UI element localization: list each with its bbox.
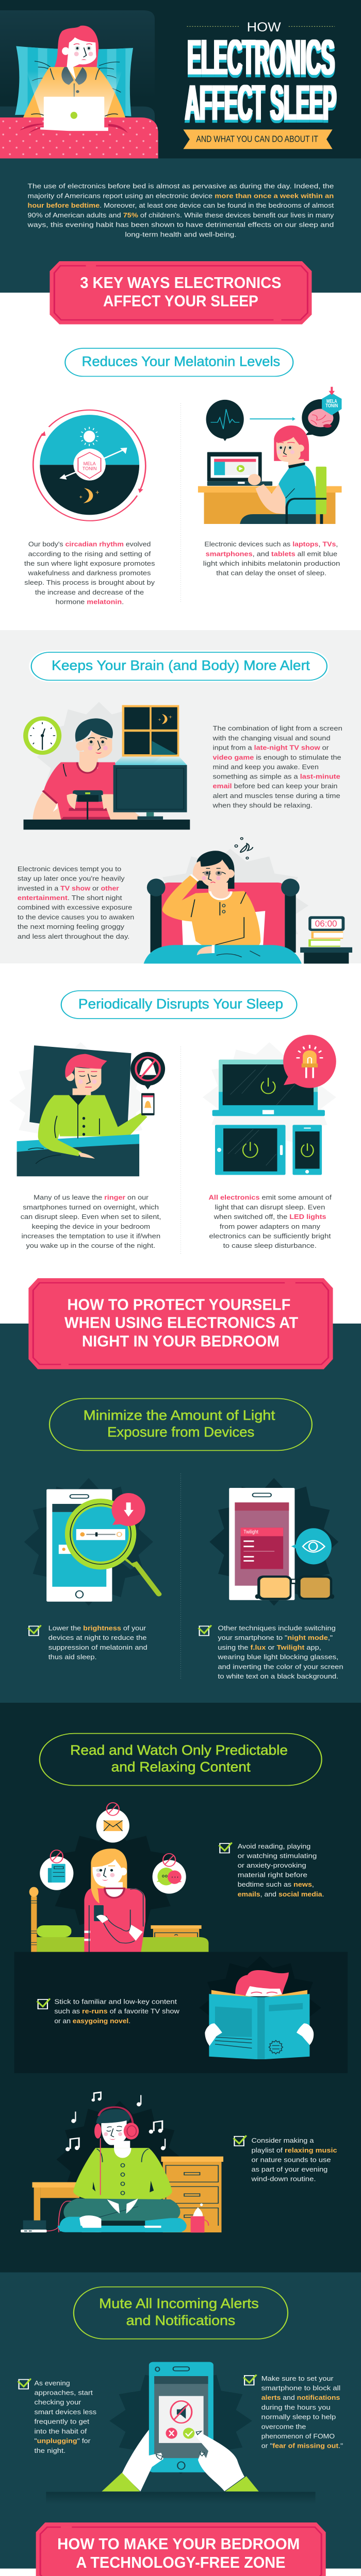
pill heading: Reduces Your Melatonin Levels bbox=[81, 353, 280, 369]
section heading: technology-free zone: A TECHNOLOGY-FREE ZONE bbox=[76, 2553, 286, 2571]
checklist: avoid stimulating material: emails, and social media. bbox=[238, 1891, 324, 1898]
illustration: woman at laptop with melatonin thought: TONIN bbox=[325, 403, 338, 409]
pill heading bbox=[74, 2287, 288, 2339]
title block bbox=[183, 20, 336, 149]
checklist: block notifications: smartphone to block all bbox=[261, 2384, 340, 2392]
intro paragraph: The use of electronics before bed is almost as pervasive as during the day. Indeed, the bbox=[28, 183, 334, 190]
text: combination of light: video game is enough to stimulate the bbox=[213, 754, 341, 761]
text: all electronics emit light: from power adapters on many bbox=[220, 1223, 320, 1230]
text: circadian rhythm bbox=[24, 540, 155, 606]
intro paragraph: majority of Americans report using an electronic device more than once a week within an bbox=[28, 192, 334, 200]
pill heading: Read and Watch Only Predictable bbox=[70, 1742, 288, 1758]
text: tempt you to stay up bbox=[18, 866, 134, 940]
text: all electronics emit light: All electronics emit some amount of bbox=[208, 1194, 332, 1201]
title: how: HOW bbox=[247, 20, 281, 35]
text: ringer: you wake up in the course of the night. bbox=[26, 1242, 155, 1250]
checklist: other techniques: your smartphone to "night mode," bbox=[218, 1634, 333, 1642]
text: blue light: light which inhibits melatonin production bbox=[203, 560, 340, 567]
checklist: unplugging: the night. bbox=[35, 2447, 65, 2454]
checklist: relaxing music: Consider making a bbox=[252, 2137, 314, 2144]
pill heading: Minimize the Amount of Light bbox=[84, 1408, 275, 1423]
checklist: block notifications: during the hours you bbox=[261, 2404, 331, 2412]
pill heading bbox=[40, 1734, 322, 1786]
text: circadian rhythm: hormone melatonin. bbox=[56, 598, 124, 606]
intro paragraph: ways, this evening habit has been shown to have detrimental effects on our sleep and bbox=[27, 221, 334, 229]
illustration: person listening to music bbox=[32, 2092, 223, 2232]
subtitle ribbon bbox=[183, 129, 333, 149]
panel: disrupts sleep bbox=[9, 991, 336, 1255]
intro paragraph: 90% of American adults and 75% of children's. While these devices benefit our lives in many bbox=[28, 212, 334, 219]
text: ringer: smartphones turned on overnight, which bbox=[23, 1204, 159, 1211]
checklist: avoid stimulating material bbox=[219, 1842, 324, 1898]
section heading: how to protect yourself: NIGHT IN YOUR BEDROOM bbox=[82, 1332, 280, 1350]
text: circadian rhythm: the increase and decrease of the bbox=[35, 589, 144, 597]
checklist: familiar content: such as re-runs of a favorite TV show bbox=[54, 2008, 179, 2015]
section heading: how to protect yourself bbox=[28, 1278, 333, 1369]
diagram: circadian melatonin cycle: MELA bbox=[84, 461, 96, 467]
checklist: lower brightness: thus aid sleep. bbox=[48, 1653, 97, 1661]
checklist: lower brightness: Lower the brightness of your bbox=[48, 1624, 146, 1632]
text: ringer: keeping the device in your bedroom bbox=[32, 1223, 150, 1230]
intro paragraph: long-term health and well-being. bbox=[125, 231, 236, 239]
text: all electronics emit light bbox=[208, 1194, 332, 1250]
checklist: unplugging: approaches, start bbox=[35, 2389, 93, 2397]
text: tempt you to stay up: entertainment. The short night bbox=[18, 894, 122, 902]
text: combination of light: something as simple as a last-minute bbox=[213, 773, 340, 781]
text: combination of light: The combination of light from a screen bbox=[213, 725, 342, 733]
text: combination of light: mind and keep you awake. Even bbox=[213, 764, 319, 771]
text: combination of light: when they should be relaxing. bbox=[212, 802, 313, 809]
checklist: avoid stimulating material: bedtime such as news, bbox=[238, 1881, 314, 1889]
panel: minimize light exposure bbox=[24, 1398, 343, 1680]
checklist: avoid stimulating material: Avoid reading, playing bbox=[238, 1843, 310, 1850]
checklist: block notifications: or "fear of missing out." bbox=[261, 2442, 343, 2450]
text: all electronics emit light: light that can disrupt sleep. Even bbox=[215, 1204, 325, 1211]
pill heading bbox=[50, 1398, 312, 1450]
checklist: unplugging: "unplugging" for bbox=[35, 2437, 90, 2445]
pill heading: Exposure from Devices bbox=[107, 1424, 254, 1440]
illustration: sleeping boy with ringing phone bbox=[9, 1042, 165, 1176]
pill heading: and Relaxing Content bbox=[111, 1759, 251, 1775]
text: all electronics emit light: when switched off, the LED lights bbox=[214, 1213, 326, 1221]
checklist: familiar content bbox=[37, 1998, 179, 2025]
section heading: technology-free zone bbox=[36, 2522, 326, 2576]
text: all electronics emit light: electronics can be sufficiently bright bbox=[209, 1232, 331, 1240]
pill heading bbox=[31, 652, 327, 680]
checklist: relaxing music: or nature sounds to use bbox=[252, 2156, 331, 2164]
checklist: relaxing music: as part of your evening bbox=[252, 2166, 327, 2173]
pill heading: Keeps Your Brain (and Body) More Alert bbox=[52, 657, 310, 673]
text: combination of light: email before bed can keep your brain bbox=[213, 783, 337, 790]
checklist: familiar content: or an easygoing novel. bbox=[54, 2018, 130, 2025]
checklist: block notifications: normally sleep to help bbox=[261, 2413, 336, 2421]
panel: predictable relaxing content bbox=[29, 1734, 324, 1953]
checklist: unplugging: into the habit of bbox=[35, 2428, 87, 2435]
intro paragraph bbox=[27, 183, 334, 239]
section heading: 3 key ways bbox=[50, 261, 311, 325]
text: blue light bbox=[203, 540, 340, 577]
checklist: block notifications: phenomenon of FOMO bbox=[261, 2433, 335, 2440]
illustration: phone brightness with magnifier bbox=[24, 1478, 159, 1606]
illustration: woman using laptop in bed bbox=[0, 10, 158, 159]
illustration: hands muting phone bbox=[46, 2362, 316, 2504]
illustration: woman at laptop with melatonin thought bbox=[198, 387, 342, 524]
checklist: unplugging: As evening bbox=[35, 2380, 70, 2387]
text: tempt you to stay up: invested in a TV show or other bbox=[18, 885, 119, 892]
illustration: night mode phone and blue light glasses: Twilight bbox=[243, 1529, 258, 1535]
checklist: other techniques: wearing blue light blocking glasses, bbox=[217, 1653, 338, 1661]
pill heading bbox=[65, 348, 293, 376]
checklist: lower brightness bbox=[28, 1624, 147, 1661]
checklist: other techniques: using the f.lux or Twilight app, bbox=[218, 1644, 321, 1652]
illustration: woman with phone and no-stress icons bbox=[29, 1803, 208, 1953]
diagram: circadian melatonin cycle bbox=[33, 410, 145, 521]
text: combination of light: alert and muscles tense during a time bbox=[213, 792, 340, 800]
panel: reduces melatonin bbox=[24, 348, 342, 606]
diagram: circadian melatonin cycle: TONIN bbox=[83, 466, 97, 471]
illustration: electronics standby LEDs bbox=[203, 1035, 336, 1175]
checklist: block notifications bbox=[243, 2375, 343, 2450]
illustration: night mode phone and blue light glasses bbox=[209, 1478, 338, 1606]
text: circadian rhythm: the sun where light exposure promotes bbox=[24, 560, 155, 567]
panel: mute alerts bbox=[18, 2287, 343, 2504]
panel: keeps brain alert bbox=[23, 652, 342, 829]
checklist: avoid stimulating material: material right before bbox=[238, 1871, 307, 1879]
text: circadian rhythm: wakefulness and darkness promotes bbox=[27, 569, 151, 577]
checklist: unplugging bbox=[18, 2379, 96, 2454]
pill heading: Mute All Incoming Alerts bbox=[99, 2296, 259, 2311]
checklist: other techniques: Other techniques include switching bbox=[218, 1624, 336, 1632]
text: tempt you to stay up: Electronic devices tempt you to bbox=[18, 866, 121, 873]
text: blue light: Electronic devices such as laptops, TVs, bbox=[204, 540, 338, 548]
text: circadian rhythm: according to the rising and setting of bbox=[28, 550, 151, 558]
text: blue light: smartphones, and tablets all emit blue bbox=[206, 550, 337, 558]
text: circadian rhythm: Our body's circadian rhythm evolved bbox=[28, 540, 151, 548]
checklist: unplugging: smart devices less bbox=[35, 2409, 96, 2416]
text: all electronics emit light: to cause sleep disturbance. bbox=[223, 1242, 317, 1250]
text: tempt you to stay up: the next morning feeling groggy bbox=[18, 923, 124, 931]
panel: darker band bbox=[14, 1952, 348, 2073]
checklist: lower brightness: devices at night to reduce the bbox=[48, 1634, 146, 1642]
text: blue light: that can delay the onset of sleep. bbox=[216, 569, 326, 577]
checklist: relaxing music: playlist of relaxing music bbox=[252, 2147, 337, 2154]
checklist: unplugging: frequently to get bbox=[35, 2418, 90, 2426]
text: tempt you to stay up: combined with excessive exposure bbox=[18, 904, 132, 911]
text: ringer: increases the temptation to use it if/when bbox=[22, 1232, 160, 1240]
text: combination of light: with the changing visual and sound bbox=[212, 735, 331, 742]
text: ringer: Many of us leave the ringer on our bbox=[34, 1194, 149, 1201]
pill heading bbox=[61, 991, 297, 1019]
checklist: block notifications: overcome the bbox=[261, 2423, 306, 2431]
illustration: groggy person in bed bbox=[144, 838, 352, 963]
text: tempt you to stay up: to the device causes you to awaken bbox=[18, 913, 134, 921]
checklist: other techniques bbox=[199, 1624, 343, 1680]
text: combination of light: input from a late-night TV show or bbox=[213, 744, 329, 752]
checklist: block notifications: Make sure to set your bbox=[261, 2375, 333, 2382]
checklist: block notifications: alerts and notifications bbox=[261, 2394, 340, 2402]
music scene base: power strip, cushion and mug bbox=[21, 2221, 221, 2232]
checklist: unplugging: checking your bbox=[35, 2399, 81, 2406]
checklist: relaxing music: wind-down routine. bbox=[251, 2175, 316, 2183]
section heading: 3 key ways: 3 KEY WAYS ELECTRONICS bbox=[80, 274, 282, 292]
pill heading: Periodically Disrupts Your Sleep bbox=[78, 996, 283, 1012]
text: ringer bbox=[21, 1194, 161, 1250]
checklist: avoid stimulating material: or anxiety-provoking bbox=[238, 1862, 306, 1869]
text: tempt you to stay up: and less alert throughout the day. bbox=[18, 933, 129, 940]
text: circadian rhythm: sleep. This process is brought about by bbox=[24, 579, 155, 587]
checklist: avoid stimulating material: or watching stimulating bbox=[238, 1852, 317, 1860]
text: combination of light bbox=[212, 725, 342, 809]
checklist: familiar content: Stick to familiar and low-key content bbox=[54, 1998, 177, 2006]
checklist: other techniques: to white text on a black background. bbox=[218, 1673, 338, 1680]
checklist: relaxing music bbox=[234, 2136, 337, 2183]
checklist: other techniques: and inverting the color of your screen bbox=[218, 1663, 343, 1671]
illustration: boy gaming at night bbox=[23, 702, 190, 829]
illustration: woman at laptop with melatonin thought: MELA bbox=[326, 399, 337, 404]
text: tempt you to stay up: stay up later once you're heavily bbox=[18, 875, 125, 883]
text: ringer: can disrupt sleep. Even when set to silent, bbox=[21, 1213, 161, 1221]
panel: groggy morning bbox=[18, 838, 352, 963]
illustration: person reading a book bbox=[199, 1956, 321, 2059]
pill heading: and Notifications bbox=[126, 2313, 235, 2328]
checklist: lower brightness: suppression of melatonin and bbox=[48, 1644, 147, 1652]
illustration: groggy person in bed: 06:00 bbox=[315, 919, 337, 929]
section heading: 3 key ways: AFFECT YOUR SLEEP bbox=[103, 292, 258, 310]
panel: familiar content and music bbox=[14, 1952, 348, 2232]
